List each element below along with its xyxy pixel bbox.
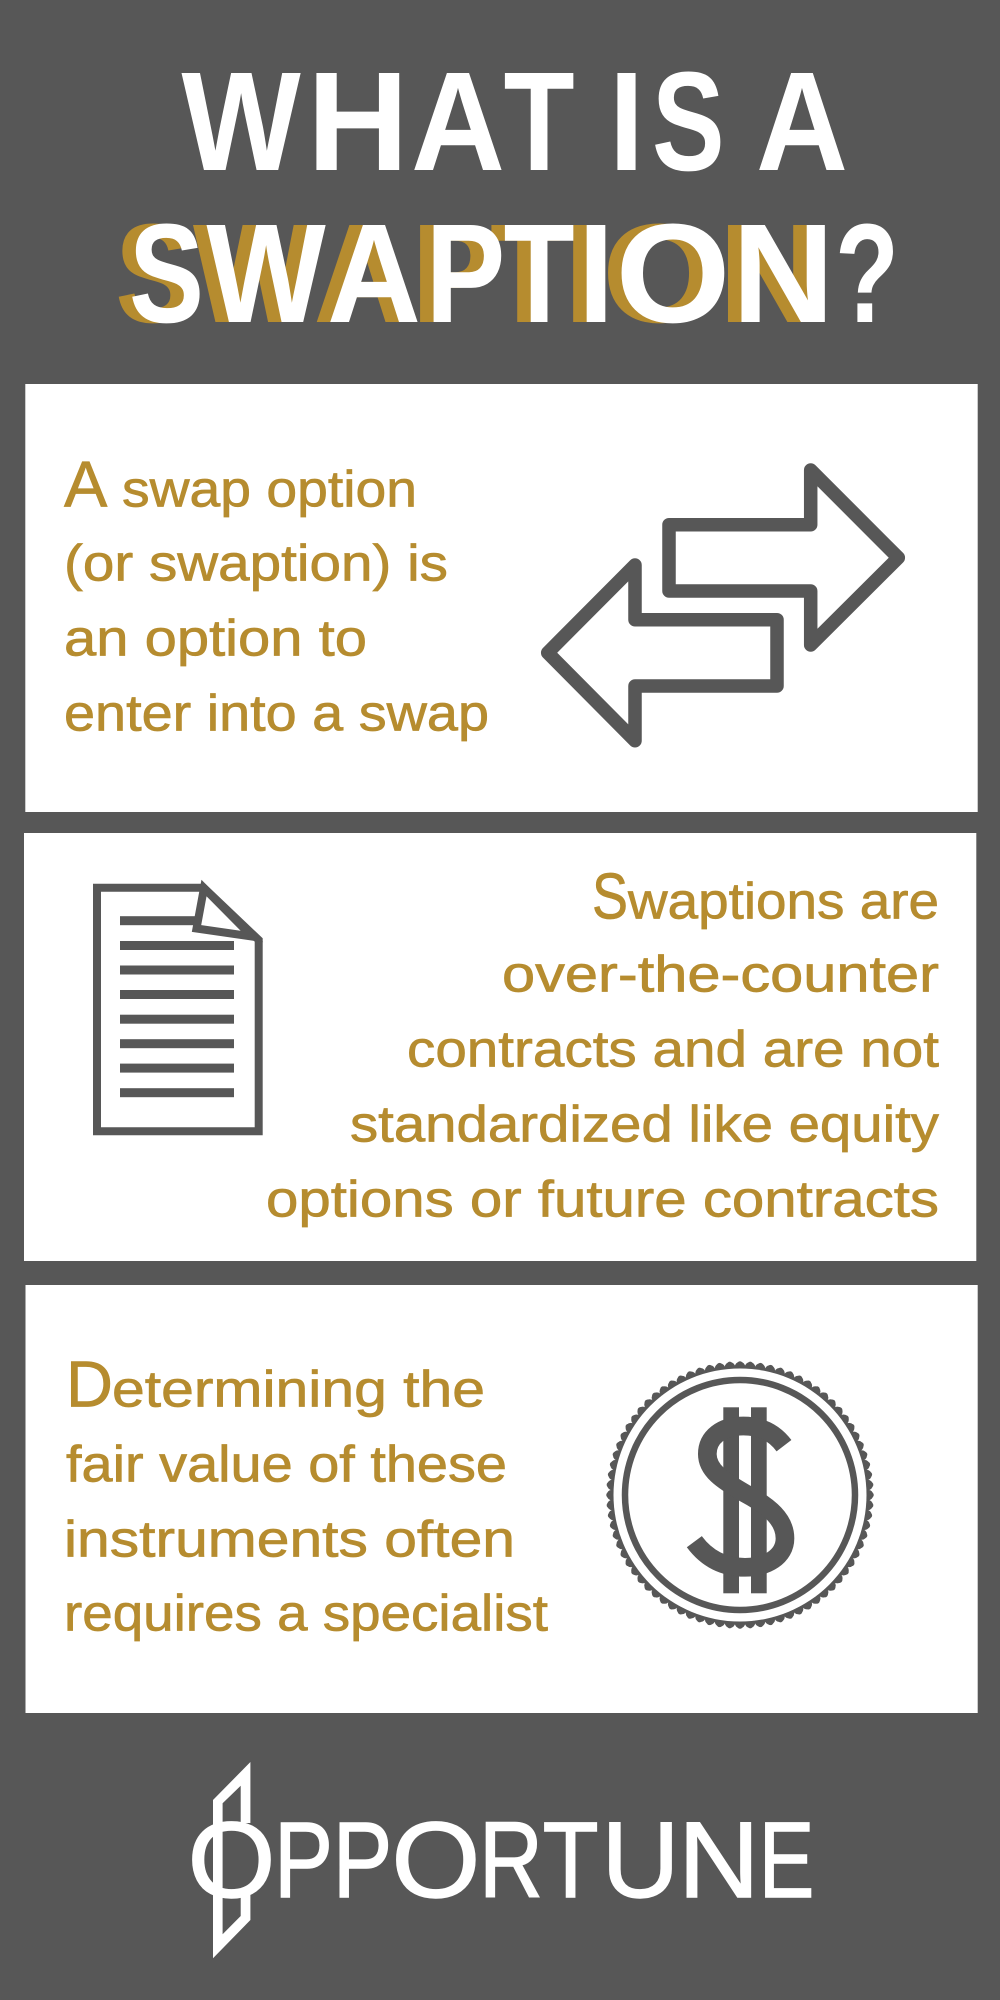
text: determining fair value: instruments often (64, 1511, 515, 1568)
icon: left arrow (548, 565, 777, 741)
text: swaptions are over-the-counter: options or future contracts (266, 1171, 939, 1228)
text: swap option definition: an option to (64, 610, 367, 667)
logo wordmark: O (391, 1799, 480, 1920)
text: swap option definition: (or swaption) is (64, 535, 448, 592)
title line: SWAPTION? in white: T (504, 194, 575, 352)
title line: SWAPTION? in white: A (327, 194, 421, 352)
title line: SWAPTION? in white: I (578, 194, 614, 352)
text: swaptions are over-the-counter: S (592, 859, 628, 932)
title (116, 42, 899, 352)
panel: over-the-counter contracts (24, 833, 976, 1261)
icon: document (97, 888, 259, 1131)
icon: dollar sign (694, 1407, 785, 1593)
title line: SWAPTION? in white: O (616, 194, 730, 352)
text: determining fair value: etermining the (112, 1361, 485, 1418)
title shadow: SWAPTION in gold: T (490, 194, 561, 352)
title line: WHAT IS A: H (307, 42, 409, 200)
text: swap option definition: enter into a swap (64, 685, 489, 742)
icon: dollar coin (609, 1364, 871, 1626)
text: determining fair value: D (66, 1348, 113, 1421)
title shadow: SWAPTION in gold: S (116, 194, 190, 352)
text: swaptions are over-the-counter: waptions are (627, 872, 939, 929)
logo wordmark: O (188, 1799, 276, 1920)
title line: WHAT IS A: S (652, 42, 725, 200)
title shadow: SWAPTION in gold: O (602, 194, 717, 352)
icon: text lines (120, 916, 234, 1097)
title line: WHAT IS A: I (609, 42, 644, 200)
logo mark (213, 1762, 250, 1958)
text: determining fair value: fair value of these (66, 1436, 507, 1493)
title shadow: SWAPTION in gold: W (193, 194, 312, 352)
logo wordmark: U (602, 1799, 680, 1920)
title line: SWAPTION? in white: P (426, 194, 505, 352)
title line: SWAPTION? in white: S (129, 194, 204, 352)
title line: WHAT IS A: A (756, 42, 848, 200)
text: determining fair value: requires a specialist (64, 1585, 548, 1642)
text: swaptions are over-the-counter: standardized like equity (350, 1096, 940, 1153)
icon: right arrow (669, 470, 898, 645)
icon: swap arrows (548, 470, 898, 741)
title line: SWAPTION? in white: ? (835, 194, 899, 352)
title shadow: SWAPTION in gold: A (314, 194, 408, 352)
title shadow: SWAPTION in gold: P (412, 194, 492, 352)
text: swap option definition: swap option (122, 461, 417, 518)
logo wordmark: E (759, 1799, 814, 1920)
logo wordmark: R (479, 1799, 543, 1920)
title line: SWAPTION? in white: W (206, 194, 326, 352)
title line: WHAT IS A: W (181, 42, 301, 200)
text: swaptions are over-the-counter: contracts and are not (407, 1021, 939, 1078)
logo wordmark: P (274, 1799, 333, 1920)
panel: swap option definition (25, 384, 978, 812)
text: swap option definition: A (64, 448, 108, 521)
title shadow: SWAPTION in gold: N (718, 194, 821, 352)
title line: WHAT IS A: T (504, 42, 575, 200)
title shadow: SWAPTION in gold: I (564, 194, 600, 352)
logo wordmark: P (333, 1799, 392, 1920)
icon: folded corner (196, 888, 252, 936)
panel: fair value (26, 1285, 978, 1713)
text: swaptions are over-the-counter: over-the-counter (502, 946, 939, 1003)
logo wordmark: N (678, 1799, 760, 1920)
title line: WHAT IS A: A (411, 42, 505, 200)
logo: Opportune (188, 1762, 814, 1958)
title line: SWAPTION? in white: N (732, 194, 834, 352)
logo wordmark: T (543, 1799, 599, 1920)
